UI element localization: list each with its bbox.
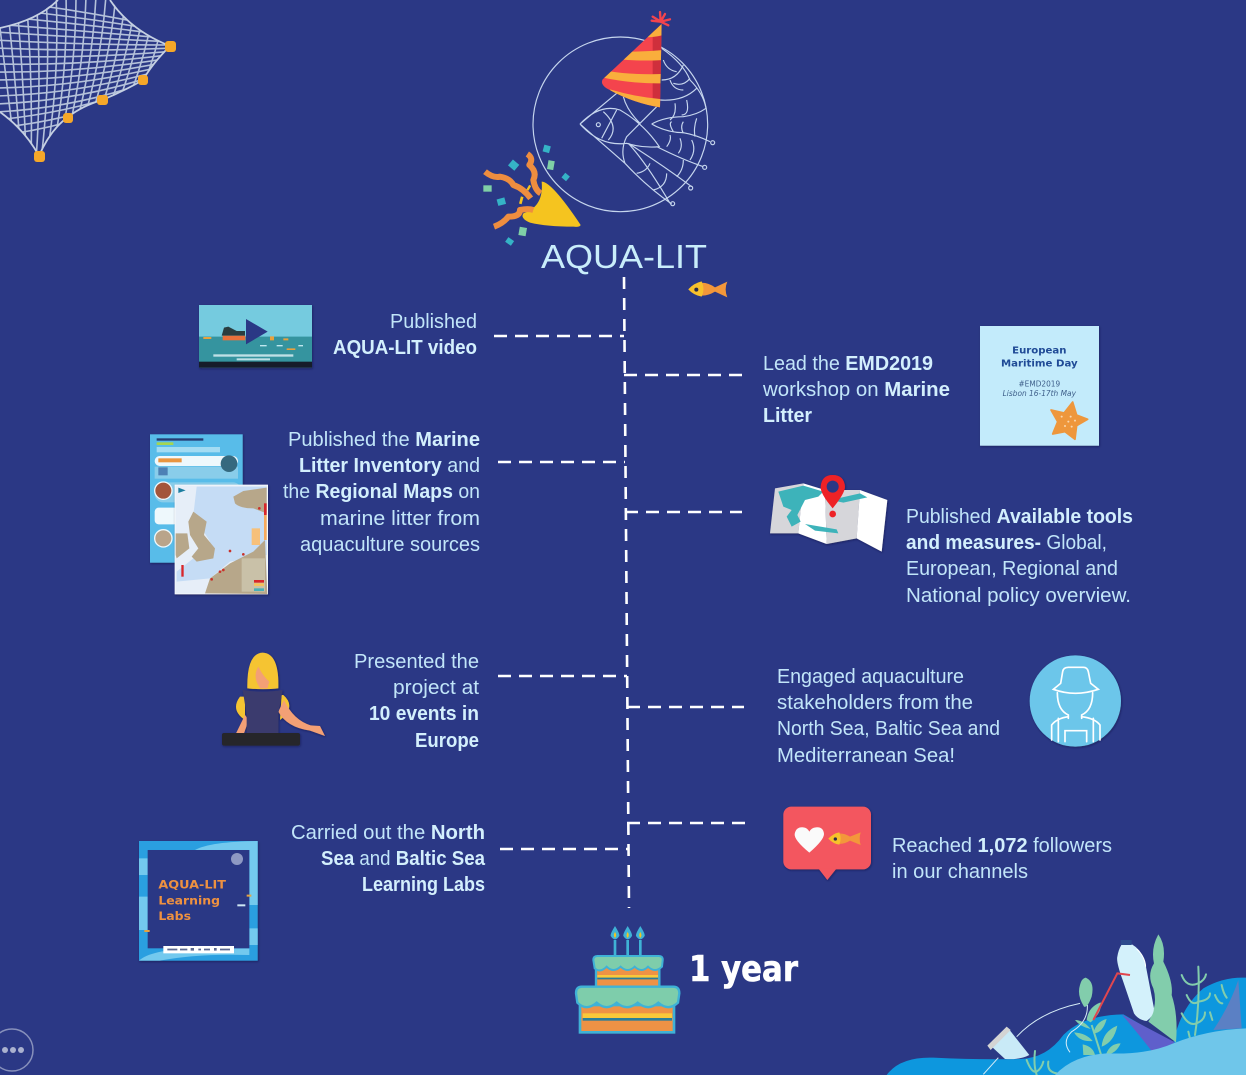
- panel: learning labs card: Learning: [158, 893, 220, 907]
- text: presented at events: [354, 651, 479, 752]
- logo fish lines: [580, 48, 715, 206]
- icon: menu circle: [0, 1029, 33, 1071]
- text: EMD2019 workshop: Lead the EMD2019: [763, 353, 933, 375]
- text: marine litter inventory: aquaculture sources: [300, 534, 480, 556]
- text: presented at events: project at: [393, 677, 479, 699]
- text: presented at events: 10 events in: [369, 703, 479, 725]
- text: engaged stakeholders: Engaged aquaculture: [777, 666, 964, 688]
- text: reached followers: Reached 1,072 followers: [892, 835, 1112, 857]
- panel: European Maritime Day card: European: [1012, 345, 1066, 356]
- panel: learning labs card: AQUA-LIT: [158, 877, 226, 891]
- back wave: [887, 978, 1246, 1075]
- text: learning labs: [291, 822, 486, 896]
- text: EMD2019 workshop: [762, 353, 950, 427]
- inventory sheet: [150, 434, 243, 563]
- party popper: [483, 145, 581, 246]
- text: 1 year: 1 year: [689, 949, 798, 990]
- panel: European Maritime Day card: Lisbon 16-17th May: [1003, 389, 1076, 398]
- panel: European Maritime Day card: #EMD2019: [1018, 379, 1060, 388]
- text: available tools: National policy overview.: [906, 585, 1131, 607]
- panel: inventory and regional map thumbnails: [150, 434, 268, 594]
- icon: europe map with pin: [770, 475, 887, 552]
- icon: like bubble: [783, 807, 871, 880]
- text: engaged stakeholders: [777, 666, 1000, 767]
- cup and line: [992, 1028, 1029, 1059]
- text: learning labs: Carried out the North: [291, 822, 485, 844]
- text: published video: AQUA-LIT video: [333, 337, 477, 359]
- text: available tools: [906, 506, 1133, 607]
- bottom right sea illustration with litter: [887, 934, 1246, 1075]
- text: engaged stakeholders: stakeholders from the: [777, 692, 973, 714]
- AQUA-LIT logo with party hat and popper: [483, 12, 715, 246]
- purple rock: [1122, 1014, 1175, 1051]
- text: marine litter inventory: marine litter from: [320, 508, 480, 530]
- text: marine litter inventory: Litter Inventory and: [299, 455, 480, 477]
- panel: video thumbnail: [199, 305, 312, 368]
- icon: presenter woman at podium: [222, 653, 325, 746]
- timeline dashed branches: [494, 336, 746, 849]
- text: presented at events: Presented the: [354, 651, 479, 673]
- icon: birthday cake: [576, 926, 679, 1032]
- icon: starfish: [1051, 402, 1088, 439]
- seaweed: [1027, 934, 1227, 1075]
- panel: learning labs card: Labs: [158, 909, 191, 923]
- party hat: [597, 12, 670, 110]
- text: EMD2019 workshop: Litter: [763, 405, 812, 427]
- text: reached followers: in our channels: [892, 861, 1028, 883]
- text: engaged stakeholders: North Sea, Baltic Sea and: [777, 718, 1000, 740]
- timeline dashed spine: [624, 277, 629, 908]
- front wave: [1055, 1028, 1246, 1075]
- text: reached followers: [892, 835, 1112, 883]
- panel: European Maritime Day card: Maritime Day: [1001, 359, 1078, 370]
- icon: farmer in circle: [1030, 655, 1121, 747]
- logo circle: [533, 37, 708, 212]
- text: learning labs: Sea and Baltic Sea: [321, 848, 486, 870]
- text: presented at events: Europe: [415, 730, 479, 752]
- regional map sheet: [175, 485, 268, 594]
- text: available tools: European, Regional and: [906, 558, 1118, 580]
- panel: European Maritime Day card: [980, 326, 1099, 446]
- text: engaged stakeholders: Mediterranean Sea!: [777, 745, 955, 767]
- red straw: [1093, 973, 1130, 1020]
- fishing net decoration: [0, 0, 176, 162]
- title: AQUA-LIT: AQUA-LIT: [541, 238, 707, 275]
- icon: small orange fish: [688, 281, 727, 297]
- text: EMD2019 workshop: workshop on Marine: [762, 379, 950, 401]
- text: available tools: and measures- Global,: [906, 532, 1107, 554]
- bottle: [1117, 944, 1154, 1021]
- text: available tools: Published Available tools: [906, 506, 1133, 528]
- text: published video: [333, 311, 477, 359]
- text: learning labs: Learning Labs: [362, 874, 485, 896]
- text: marine litter inventory: the Regional Maps on: [283, 481, 480, 503]
- text: marine litter inventory: Published the Marine: [288, 429, 480, 451]
- text: published video: Published: [390, 311, 477, 333]
- text: marine litter inventory: [283, 429, 480, 556]
- panel: learning labs card: [139, 841, 258, 961]
